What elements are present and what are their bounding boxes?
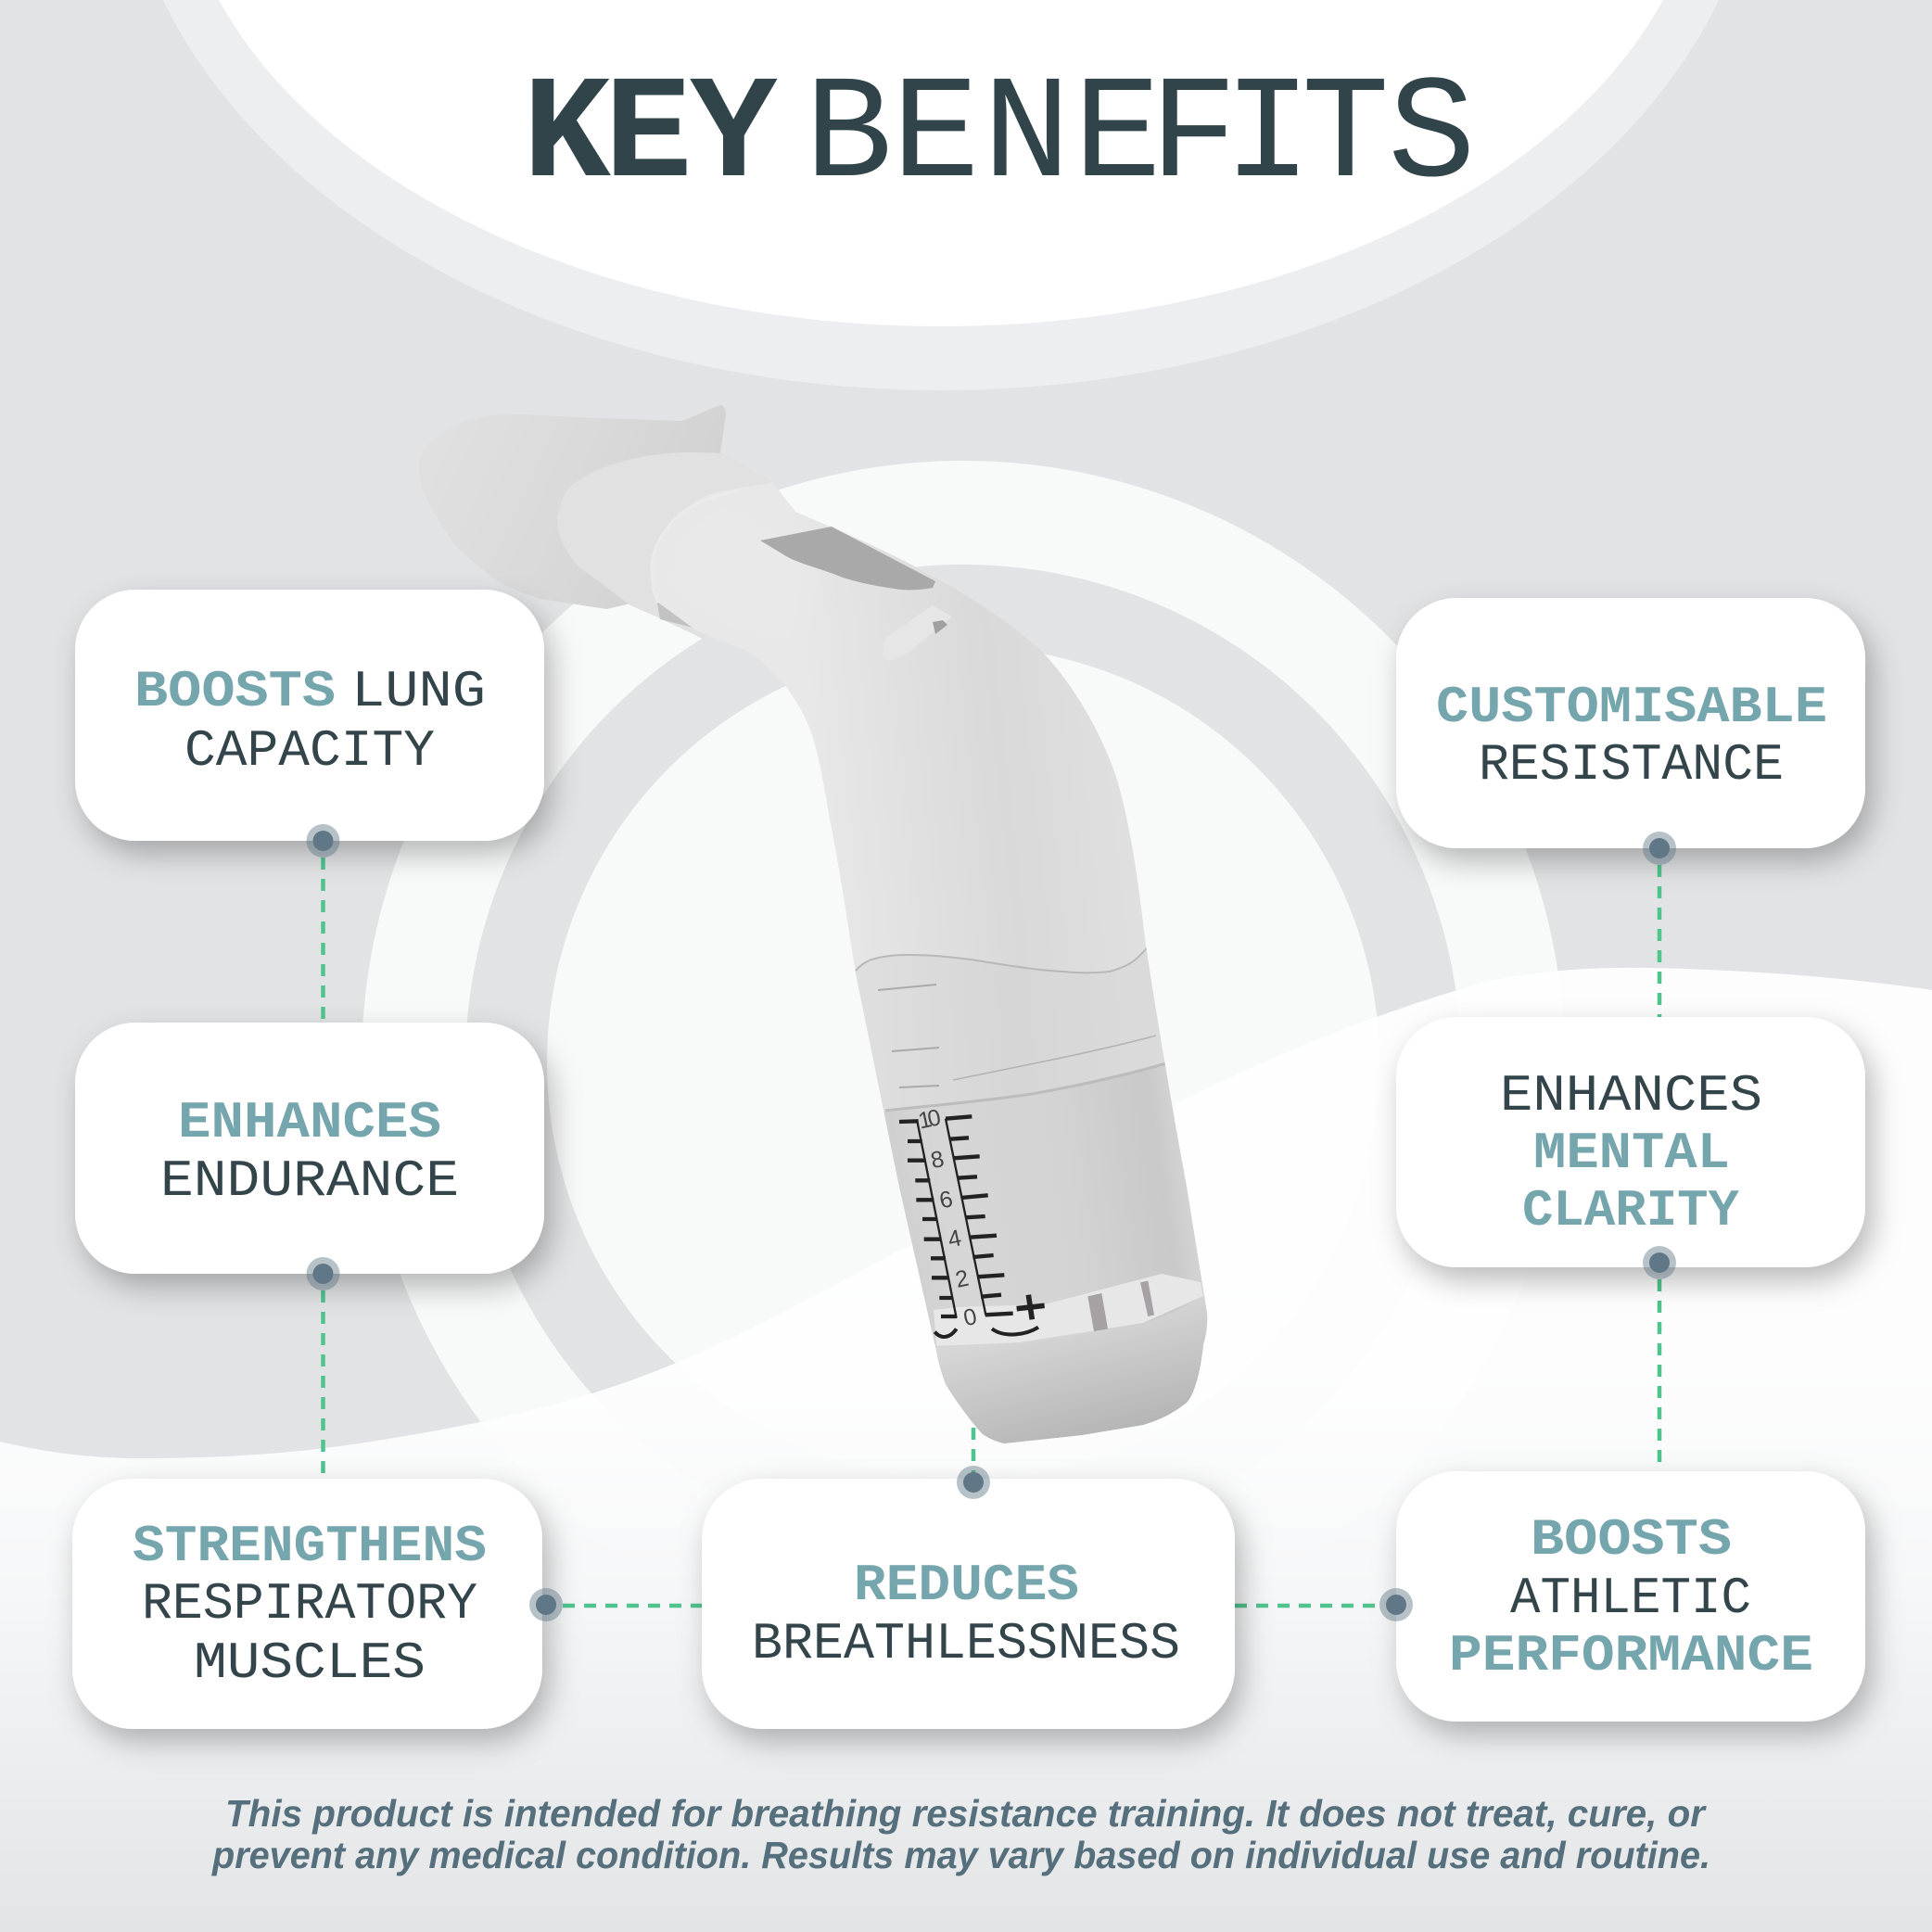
card: reduces breathlessness: BREATHLESSNESS	[752, 1614, 1180, 1673]
card: boosts lung capacity	[75, 590, 544, 841]
display window	[760, 527, 935, 590]
scale numbers: 4	[946, 1225, 964, 1253]
card: enhances mental clarity	[1396, 1017, 1865, 1267]
concentric rings behind device	[362, 461, 1565, 1664]
top arc: inner white	[176, 0, 1706, 326]
scale numbers: 0	[961, 1303, 979, 1331]
under-collar shade	[656, 598, 696, 629]
top arc: outer band	[120, 0, 1762, 390]
title: BENEFITS	[805, 54, 1476, 220]
collar line	[652, 490, 739, 603]
connector dots	[306, 824, 1676, 1621]
card: customisable resistance	[1396, 598, 1865, 848]
scale numbers: 2	[953, 1265, 972, 1293]
card: enhances mental clarity: ENHANCES	[1500, 1066, 1762, 1125]
card: strengthens respiratory muscles	[72, 1479, 542, 1729]
card: reduces breathlessness: REDUCES	[854, 1556, 1079, 1615]
card: customisable resistance: CUSTOMISABLE	[1436, 678, 1827, 737]
card: boosts athletic performance	[1396, 1471, 1865, 1722]
card: enhances mental clarity: MENTAL	[1533, 1124, 1730, 1183]
card: reduces breathlessness	[702, 1479, 1235, 1729]
card: enhances endurance: ENHANCES	[178, 1093, 441, 1152]
disclaimer: This product is intended for breathing resistance training. It does not treat, cure, or	[225, 1792, 1707, 1835]
card: boosts athletic performance: ATHLETIC	[1510, 1569, 1751, 1628]
card: enhances endurance: ENDURANCE	[160, 1151, 459, 1211]
title: KEY	[523, 54, 778, 220]
card: enhances endurance	[75, 1023, 544, 1274]
pressure scale	[899, 1104, 1154, 1337]
scale numbers: 6	[937, 1186, 955, 1214]
card: enhances mental clarity: CLARITY	[1522, 1181, 1739, 1240]
lower wave with gradient	[0, 968, 1932, 1932]
card: boosts lung capacity: LUNG	[351, 662, 486, 721]
connectors: dashed green lines	[323, 858, 1659, 1606]
clear chamber, band and cap	[855, 947, 1207, 1443]
neck	[557, 452, 795, 640]
disclaimer: prevent any medical condition. Results may vary based on individual use and routine.	[211, 1834, 1710, 1876]
scale numbers	[916, 1104, 979, 1331]
card: strengthens respiratory muscles: MUSCLES	[194, 1633, 426, 1693]
card: strengthens respiratory muscles: STRENGTHENS	[133, 1517, 487, 1576]
main body	[652, 482, 1207, 1443]
disclaimer	[211, 1792, 1710, 1876]
neck light panel	[667, 505, 816, 649]
scale numbers: 8	[928, 1146, 947, 1174]
card: boosts athletic performance: BOOSTS	[1531, 1510, 1732, 1570]
card: boosts lung capacity: CAPACITY	[184, 721, 435, 781]
mouthpiece flap	[419, 405, 772, 612]
scale numbers: 10	[916, 1104, 943, 1135]
card: customisable resistance: RESISTANCE	[1479, 735, 1784, 794]
slot	[883, 605, 952, 661]
device: breathing trainer	[461, 405, 1207, 1443]
card: strengthens respiratory muscles: RESPIRATORY	[142, 1574, 477, 1633]
card: boosts lung capacity: BOOSTS	[134, 662, 336, 721]
card: boosts athletic performance: PERFORMANCE	[1449, 1626, 1813, 1685]
